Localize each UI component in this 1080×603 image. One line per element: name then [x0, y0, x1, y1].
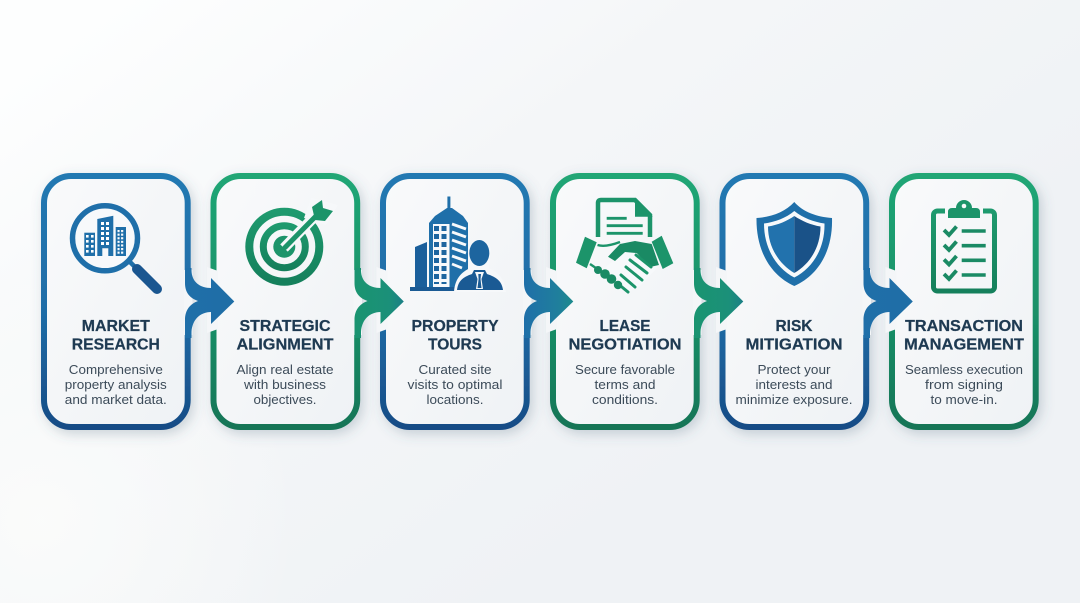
- heading: transaction management: TRANSACTION: [905, 318, 1023, 335]
- text: risk mitigation description: Protect your: [758, 362, 831, 377]
- heading: transaction management: [904, 318, 1024, 354]
- icon: document and handshake: [576, 199, 673, 292]
- text: market research description: Comprehensive: [69, 362, 163, 377]
- heading: strategic alignment: ALIGNMENT: [236, 336, 334, 354]
- panel: property tours: [383, 176, 527, 427]
- heading: transaction management: MANAGEMENT: [904, 336, 1024, 354]
- heading: property tours: [412, 318, 499, 354]
- text: strategic alignment description: Align real estate: [236, 362, 334, 377]
- heading: lease negotiation: NEGOTIATION: [568, 336, 682, 354]
- heading: lease negotiation: [568, 318, 682, 354]
- text: lease negotiation description: [575, 362, 675, 407]
- text: transaction management description: from signing: [925, 377, 1003, 392]
- heading: risk mitigation: [746, 318, 842, 354]
- icon: magnifier over buildings: [72, 206, 157, 289]
- text: property tours description: [408, 362, 503, 407]
- heading: market research: RESEARCH: [72, 336, 160, 354]
- text: lease negotiation description: conditions.: [592, 392, 658, 407]
- heading: strategic alignment: [236, 318, 334, 354]
- text: strategic alignment description: with business: [243, 377, 327, 392]
- panel: risk mitigation: [722, 176, 866, 427]
- heading: property tours: TOURS: [428, 336, 482, 354]
- text: market research description: [65, 362, 167, 407]
- arrow: market research to strategic alignment: [184, 267, 234, 338]
- text: risk mitigation description: minimize exposure.: [736, 392, 852, 407]
- text: risk mitigation description: [736, 362, 852, 407]
- icon: target with arrow: [249, 198, 338, 282]
- icon: clipboard checklist: [934, 200, 994, 291]
- heading: risk mitigation: RISK: [776, 318, 813, 335]
- panel: transaction management: [892, 176, 1036, 427]
- arrow: risk mitigation to transaction management: [862, 267, 913, 338]
- arrow: lease negotiation to risk mitigation: [693, 267, 743, 338]
- heading: strategic alignment: STRATEGIC: [240, 318, 331, 335]
- arrow: strategic alignment to property tours: [354, 267, 404, 338]
- text: strategic alignment description: [236, 362, 334, 407]
- heading: market research: MARKET: [82, 318, 150, 335]
- text: lease negotiation description: terms and: [594, 377, 656, 392]
- text: market research description: property analysis: [65, 377, 167, 392]
- panel: market research: [44, 176, 188, 427]
- heading: property tours: PROPERTY: [412, 318, 499, 335]
- text: transaction management description: Seamless execution: [905, 362, 1023, 377]
- text: property tours description: locations.: [426, 392, 484, 407]
- arrow: property tours to lease negotiation: [523, 267, 573, 338]
- panel: lease negotiation: [553, 176, 697, 427]
- heading: market research: [72, 318, 160, 354]
- text: lease negotiation description: Secure favorable: [575, 362, 675, 377]
- icon: shield: [756, 202, 832, 286]
- text: property tours description: Curated site: [418, 362, 492, 377]
- heading: risk mitigation: MITIGATION: [746, 336, 842, 354]
- text: property tours description: visits to optimal: [408, 377, 503, 392]
- text: transaction management description: [905, 362, 1023, 407]
- panel: strategic alignment: [214, 176, 357, 427]
- text: market research description: and market data.: [65, 392, 167, 407]
- text: risk mitigation description: interests and: [756, 377, 832, 392]
- icon: tower and businessperson: [410, 196, 506, 292]
- text: transaction management description: to move-in.: [930, 392, 998, 407]
- heading: lease negotiation: LEASE: [600, 318, 651, 335]
- text: strategic alignment description: objectives.: [254, 392, 316, 407]
